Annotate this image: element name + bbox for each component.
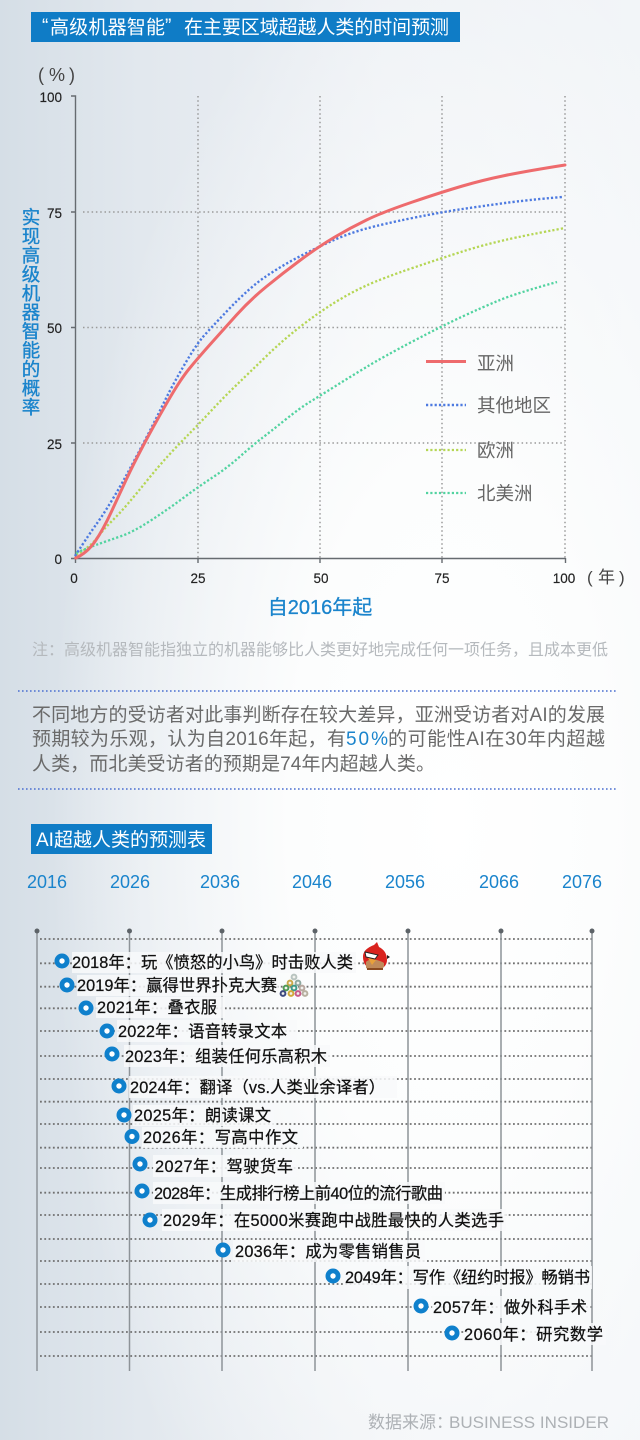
y axis unit: ( — [38, 65, 44, 85]
y axis unit: % — [49, 65, 65, 85]
series: other regions — [75, 197, 562, 556]
milestone: 2021: 2021年：叠衣服 — [97, 999, 217, 1017]
timeline year labels: 2046 — [292, 872, 332, 892]
y axis numbers: 50 — [47, 321, 62, 336]
milestone: 2028: 2028年：生成排行榜上前40位的流行歌曲 — [154, 1185, 443, 1203]
x axis unit: ) — [619, 568, 625, 587]
milestone: 2024: 2024年：翻译（vs.人类业余译者） — [130, 1078, 385, 1097]
y axis numbers: 75 — [47, 206, 62, 221]
note: 注：高级机器智能指独立的机器能够比人类更好地完成任何一项任务，且成本更低 — [32, 641, 608, 659]
callout: regional differences: 预期较为乐观，认为自2016年起，有 — [32, 728, 346, 750]
heading: chart title: “ — [42, 16, 48, 37]
line chart: probability of high-level machine intelligence — [22, 65, 625, 619]
milestone: 2023: 2023年：组装任何乐高积木 — [125, 1048, 327, 1066]
heading: chart title: ” — [165, 16, 171, 37]
legend — [426, 353, 551, 504]
series: Europe — [76, 228, 565, 555]
timeline year labels: 2056 — [385, 872, 425, 892]
y axis numbers: 100 — [39, 90, 62, 105]
x axis title: 自2016年起 — [268, 596, 372, 619]
legend: 其他地区 — [477, 395, 551, 416]
callout: regional differences: 的可能性AI在30年内超越 — [388, 728, 605, 750]
source: 数据来源： — [368, 1413, 453, 1432]
x axis numbers: 0 — [70, 571, 78, 586]
x axis numbers: 25 — [190, 571, 206, 586]
heading: timeline title: AI超越人类的预测表 — [36, 829, 206, 851]
heading: chart title: 在主要区域超越人类的时间预测 — [184, 16, 449, 38]
y axis unit: ) — [69, 65, 75, 85]
x axis unit — [587, 568, 625, 587]
milestone: 2018: 2018年：玩《愤怒的小鸟》时击败人类 — [72, 954, 353, 972]
heading: chart title — [31, 12, 460, 42]
legend: 亚洲 — [477, 353, 514, 374]
milestone: 2027: 2027年：驾驶货车 — [155, 1158, 293, 1176]
timeline year labels: 2026 — [110, 872, 150, 892]
milestone: 2025: 2025年：朗读课文 — [134, 1107, 271, 1125]
milestone: 2036: 2036年：成为零售销售员 — [235, 1243, 421, 1261]
axes — [71, 96, 566, 563]
timeline year labels — [27, 872, 602, 892]
milestone: 2027 — [132, 1155, 296, 1177]
timeline year labels: 2066 — [479, 872, 519, 892]
y axis unit — [38, 65, 75, 85]
timeline year labels: 2036 — [200, 872, 240, 892]
timeline grid — [34, 928, 594, 1371]
x axis unit: ( — [587, 568, 593, 587]
grid lines — [83, 96, 565, 558]
timeline year labels: 2076 — [562, 872, 602, 892]
callout: regional differences — [18, 691, 617, 789]
milestone: 2060: 2060年：研究数学 — [464, 1326, 603, 1344]
legend: 北美洲 — [477, 483, 533, 504]
timeline year labels: 2016 — [27, 872, 67, 892]
source: BUSINESS INSIDER — [449, 1413, 609, 1432]
x axis numbers: 50 — [313, 571, 329, 586]
callout: regional differences: 不同地方的受访者对此事判断存在较大差异，亚洲受访者对AI的发展 — [32, 704, 605, 726]
x axis numbers: 100 — [553, 571, 575, 586]
x axis unit: 年 — [598, 568, 615, 587]
milestone: 2022: 2022年：语音转录文本 — [118, 1023, 287, 1041]
milestone: 2029: 2029年：在5000米赛跑中战胜最快的人类选手 — [163, 1211, 504, 1230]
x axis numbers — [70, 571, 575, 586]
milestone: 2049: 2049年：写作《纽约时报》畅销书 — [345, 1269, 590, 1287]
callout: regional differences: 50% — [346, 729, 388, 750]
y axis numbers: 25 — [47, 437, 62, 452]
y axis title: 实现高级机器智能的概率 — [22, 207, 41, 418]
source — [368, 1413, 609, 1432]
x axis numbers: 75 — [434, 571, 450, 586]
callout: regional differences: 人类，而北美受访者的预期是74年内超越人类。 — [32, 753, 435, 775]
series: North America — [76, 282, 557, 553]
milestone: 2019: 2019年：赢得世界扑克大赛 — [77, 976, 277, 995]
y axis numbers — [39, 90, 62, 567]
heading: chart title: 高级机器智能 — [50, 16, 165, 38]
y axis numbers: 0 — [54, 552, 62, 567]
legend: 欧洲 — [477, 440, 514, 461]
icon: poker chips — [281, 975, 307, 996]
milestone: 2026: 2026年：写高中作文 — [143, 1129, 298, 1147]
icon: red bird — [363, 942, 390, 970]
series: Asia — [76, 165, 565, 558]
milestone: 2057: 2057年：做外科手术 — [433, 1299, 587, 1317]
heading: timeline title — [31, 824, 212, 854]
